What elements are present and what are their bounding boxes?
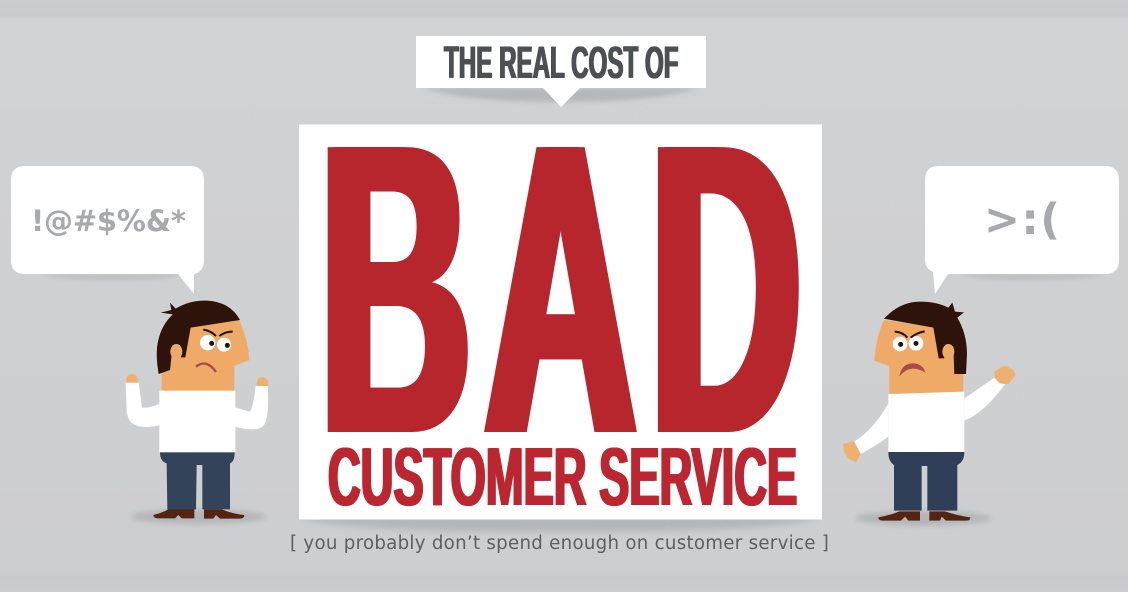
title tag: the real cost of: THE REAL COST OF	[444, 37, 678, 88]
right speech bubble	[925, 166, 1119, 294]
word: BAD: BAD	[320, 56, 801, 520]
left speech bubble	[11, 166, 204, 294]
title tag: the real cost of	[416, 36, 706, 107]
subtitle: [ you probably don’t spend enough on customer service ]	[290, 533, 829, 554]
main title panel	[299, 56, 822, 534]
right speech bubble: >:(	[984, 195, 1061, 245]
left character	[126, 300, 268, 526]
left speech bubble: !@#$%&*	[31, 204, 186, 238]
words: customer service: CUSTOMER SERVICE	[328, 430, 797, 523]
right character	[843, 302, 1016, 527]
